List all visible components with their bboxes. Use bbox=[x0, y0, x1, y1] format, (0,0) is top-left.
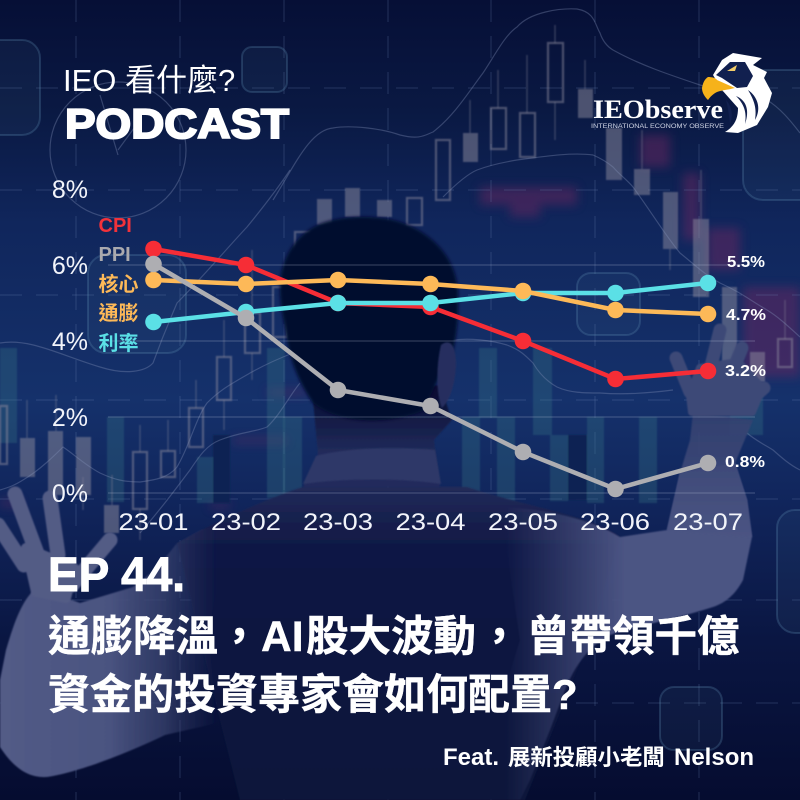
person: left hand bbox=[0, 494, 110, 598]
end value labels: 4.7% bbox=[726, 307, 766, 324]
y axis labels: 0% bbox=[52, 480, 88, 508]
y axis labels bbox=[52, 176, 88, 508]
person: torso bbox=[177, 487, 620, 800]
series name: IEO 看什麼? bbox=[63, 63, 235, 98]
guest credit: Feat. bbox=[443, 744, 499, 771]
person: ear bbox=[437, 342, 456, 408]
x axis labels bbox=[118, 509, 743, 536]
legend: 通膨 bbox=[98, 302, 138, 325]
legend: 核心 bbox=[98, 272, 138, 296]
background glow: magenta market haze bbox=[0, 135, 800, 508]
episode heading bbox=[48, 549, 754, 771]
person: right sleeve bbox=[470, 463, 752, 800]
x axis labels: 23-04 bbox=[396, 509, 466, 536]
x axis labels: 23-01 bbox=[118, 509, 188, 536]
series: CPI bbox=[145, 241, 716, 387]
episode number: EP 44. bbox=[48, 549, 185, 602]
series: PPI bbox=[145, 256, 716, 497]
person: right forearm bbox=[667, 413, 753, 537]
y axis labels: 6% bbox=[52, 252, 88, 280]
x axis labels: 23-02 bbox=[211, 509, 281, 536]
series: interest rate bbox=[145, 275, 716, 330]
line chart bbox=[52, 176, 766, 536]
podcast title bbox=[63, 63, 289, 147]
x axis labels: 23-03 bbox=[303, 509, 373, 536]
podcast word: PODCAST bbox=[65, 100, 289, 147]
legend: PPI bbox=[98, 244, 131, 266]
guest credit: 展新投顧小老闆 bbox=[508, 745, 665, 770]
legend: CPI bbox=[98, 215, 132, 237]
person: head and hair bbox=[280, 217, 458, 420]
icon: eagle head bbox=[702, 53, 772, 133]
background: candlestick chart bbox=[0, 25, 792, 540]
headline line 1: 股大波動 bbox=[306, 614, 476, 661]
x axis labels: 23-06 bbox=[580, 509, 650, 536]
end value labels: 5.5% bbox=[727, 254, 765, 271]
legend: 利率 bbox=[98, 332, 138, 355]
person: right hand bbox=[676, 330, 764, 412]
headline line 1: 曾帶領千億 bbox=[527, 614, 740, 661]
headline line 1: AI bbox=[261, 614, 304, 661]
series: core inflation bbox=[145, 272, 716, 322]
logo wordmark: IEObserve bbox=[593, 95, 723, 124]
headline line 1: ， bbox=[478, 603, 521, 664]
end value labels: 0.8% bbox=[725, 454, 765, 471]
headline line 1: 通膨降溫 bbox=[48, 614, 218, 661]
person: left sleeve bbox=[0, 520, 240, 777]
y axis labels: 2% bbox=[52, 404, 88, 432]
x axis labels: 23-07 bbox=[673, 509, 743, 536]
guest credit: Nelson bbox=[674, 744, 754, 771]
chart baselines bbox=[108, 265, 755, 493]
headline line 2: 資金的投資專家會如何配置? bbox=[48, 671, 578, 718]
logo tagline: INTERNATIONAL ECONOMY OBSERVE bbox=[591, 123, 724, 130]
end value labels: 3.2% bbox=[725, 363, 766, 380]
y axis labels: 4% bbox=[52, 328, 88, 356]
logo: IEObserve eagle bbox=[591, 53, 772, 133]
headline line 1: ， bbox=[218, 603, 261, 664]
y axis labels: 8% bbox=[52, 176, 88, 204]
legend bbox=[98, 215, 138, 355]
end value labels bbox=[725, 254, 766, 471]
person: neck bbox=[303, 385, 452, 487]
person: shirt collar bbox=[303, 448, 441, 484]
background: trend curves bbox=[0, 9, 800, 533]
x axis labels: 23-05 bbox=[488, 509, 558, 536]
